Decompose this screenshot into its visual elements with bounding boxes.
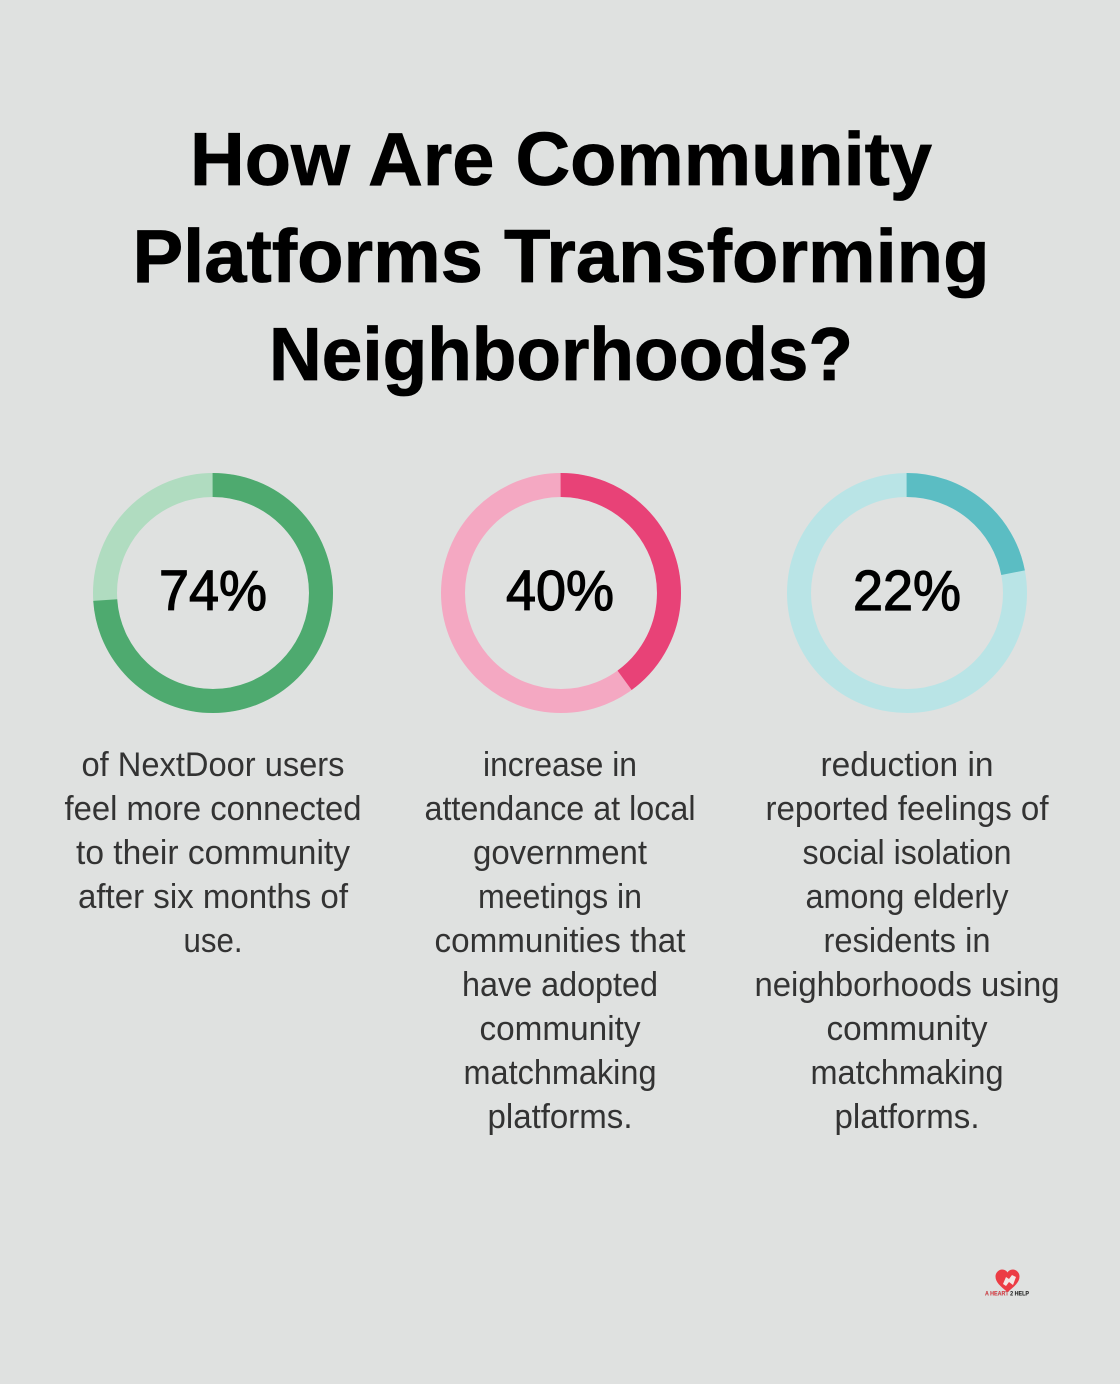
description: 40% stat: meetings in xyxy=(478,878,642,916)
description: 22% stat: platforms. xyxy=(834,1098,980,1136)
title xyxy=(132,117,990,396)
description: 22% stat: residents in xyxy=(824,922,990,960)
donut chart: 22%: 22% xyxy=(853,559,961,623)
description: 40% stat: increase in xyxy=(483,746,637,784)
title: Neighborhoods? xyxy=(269,312,853,396)
description: 74% stat: to their community xyxy=(76,834,350,872)
description: 40% stat: government xyxy=(473,834,648,872)
donut chart: 40% xyxy=(453,485,669,701)
description: 22% stat: matchmaking xyxy=(810,1054,1004,1092)
logo: A Heart 2 Help xyxy=(985,1270,1029,1298)
description: 40% stat xyxy=(424,746,696,1136)
title: How Are Community xyxy=(190,117,932,201)
donut chart: 74% xyxy=(105,485,321,701)
description: 40% stat: have adopted xyxy=(462,966,658,1004)
donut chart: 40%: 40% xyxy=(506,559,614,623)
description: 22% stat xyxy=(754,746,1060,1136)
description: 40% stat: matchmaking xyxy=(464,1054,656,1092)
description: 22% stat: reported feelings of xyxy=(766,790,1049,828)
panel: 40% stat xyxy=(424,485,696,1136)
description: 22% stat: neighborhoods using xyxy=(754,966,1060,1004)
panel: 22% stat xyxy=(754,485,1060,1136)
title: Platforms Transforming xyxy=(132,214,990,298)
logo wordmark: A HEART 2 HELP xyxy=(985,1292,1029,1298)
description: 22% stat: social isolation xyxy=(802,834,1012,872)
description: 22% stat: community xyxy=(826,1010,988,1048)
description: 74% stat: of NextDoor users xyxy=(82,746,344,784)
description: 74% stat: after six months of xyxy=(78,878,349,916)
donut chart: 74%: 74% xyxy=(159,559,267,623)
description: 40% stat: attendance at local xyxy=(424,790,696,828)
icon: heart with hands xyxy=(996,1270,1020,1292)
description: 74% stat: feel more connected xyxy=(64,790,362,828)
description: 22% stat: reduction in xyxy=(820,746,994,784)
donut chart: 22% xyxy=(799,485,1015,701)
description: 74% stat: use. xyxy=(184,922,242,960)
description: 74% stat xyxy=(64,746,362,960)
description: 22% stat: among elderly xyxy=(806,878,1008,916)
panel: 74% stat xyxy=(64,485,362,960)
description: 40% stat: community xyxy=(480,1010,640,1048)
description: 40% stat: communities that xyxy=(434,922,686,960)
description: 40% stat: platforms. xyxy=(488,1098,632,1136)
